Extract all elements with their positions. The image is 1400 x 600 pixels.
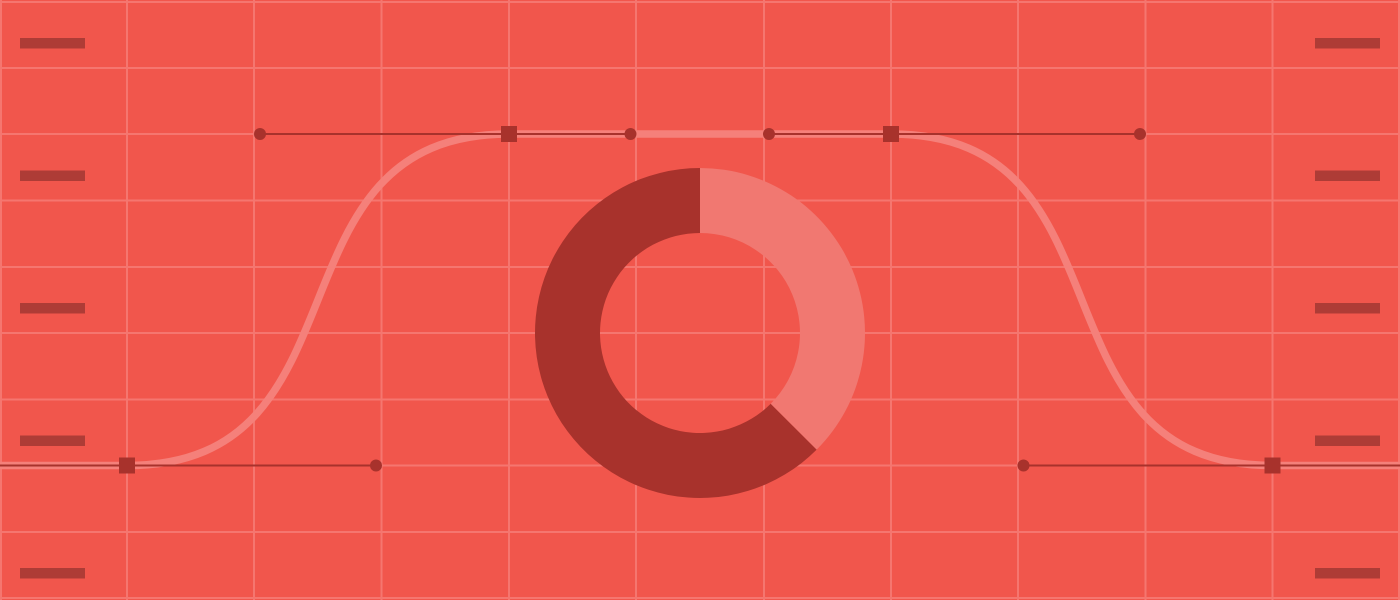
donut segment: dark (535, 168, 817, 498)
bezier curve (0, 134, 1400, 466)
handle lines (0, 134, 1400, 466)
bezier handles (0, 126, 1400, 474)
handle end points (254, 128, 1146, 472)
donut segment: light (700, 168, 865, 450)
anchor points (119, 126, 1280, 474)
donut chart (535, 168, 865, 498)
left scale markers (20, 38, 85, 578)
right scale markers (1315, 38, 1380, 578)
